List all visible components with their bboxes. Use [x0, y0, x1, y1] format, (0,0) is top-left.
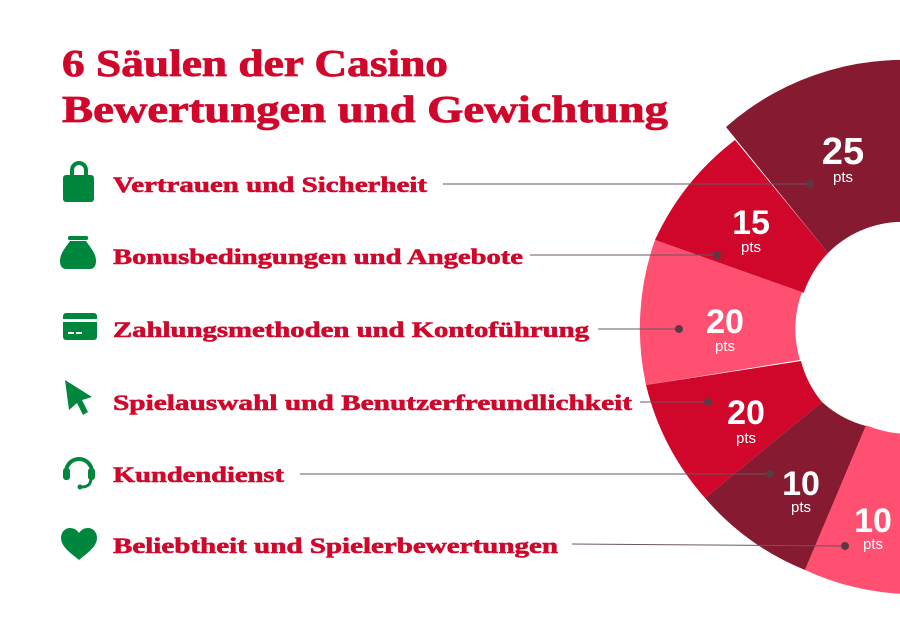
category labels: Kundendienst — [113, 462, 285, 487]
title: Bewertungen und Gewichtung — [62, 89, 668, 131]
segment labels: pts — [833, 169, 853, 186]
category labels: Vertrauen und Sicherheit — [113, 172, 428, 197]
segment labels: 10 — [782, 465, 820, 503]
segment labels: pts — [791, 499, 811, 516]
segment labels — [706, 131, 892, 553]
title: 6 Säulen der Casino — [62, 43, 448, 85]
category labels: Spielauswahl und Benutzerfreundlichkeit — [113, 390, 633, 415]
segment labels: 25 — [822, 131, 864, 173]
icon: heart — [61, 528, 97, 560]
segment labels: 10 — [854, 502, 892, 540]
title — [62, 43, 668, 131]
segment labels: 20 — [706, 303, 744, 341]
category labels: Bonusbedingungen und Angebote — [113, 244, 523, 269]
icon: cursor — [65, 380, 92, 415]
category labels — [113, 172, 633, 558]
segment labels: pts — [741, 239, 761, 256]
icon: lock — [63, 161, 94, 202]
donut chart — [640, 60, 900, 594]
segment labels: pts — [736, 430, 756, 447]
connector lines — [300, 180, 849, 550]
category labels: Zahlungsmethoden und Kontoführung — [113, 317, 589, 342]
segment labels: 20 — [727, 394, 765, 432]
segment labels: pts — [715, 338, 735, 355]
icon: money bag — [60, 236, 96, 269]
category labels: Beliebtheit und Spielerbewertungen — [113, 533, 558, 558]
icon: headset — [63, 459, 95, 490]
segment labels: pts — [863, 536, 883, 553]
icon: credit card — [63, 313, 97, 340]
segment labels: 15 — [732, 204, 770, 242]
